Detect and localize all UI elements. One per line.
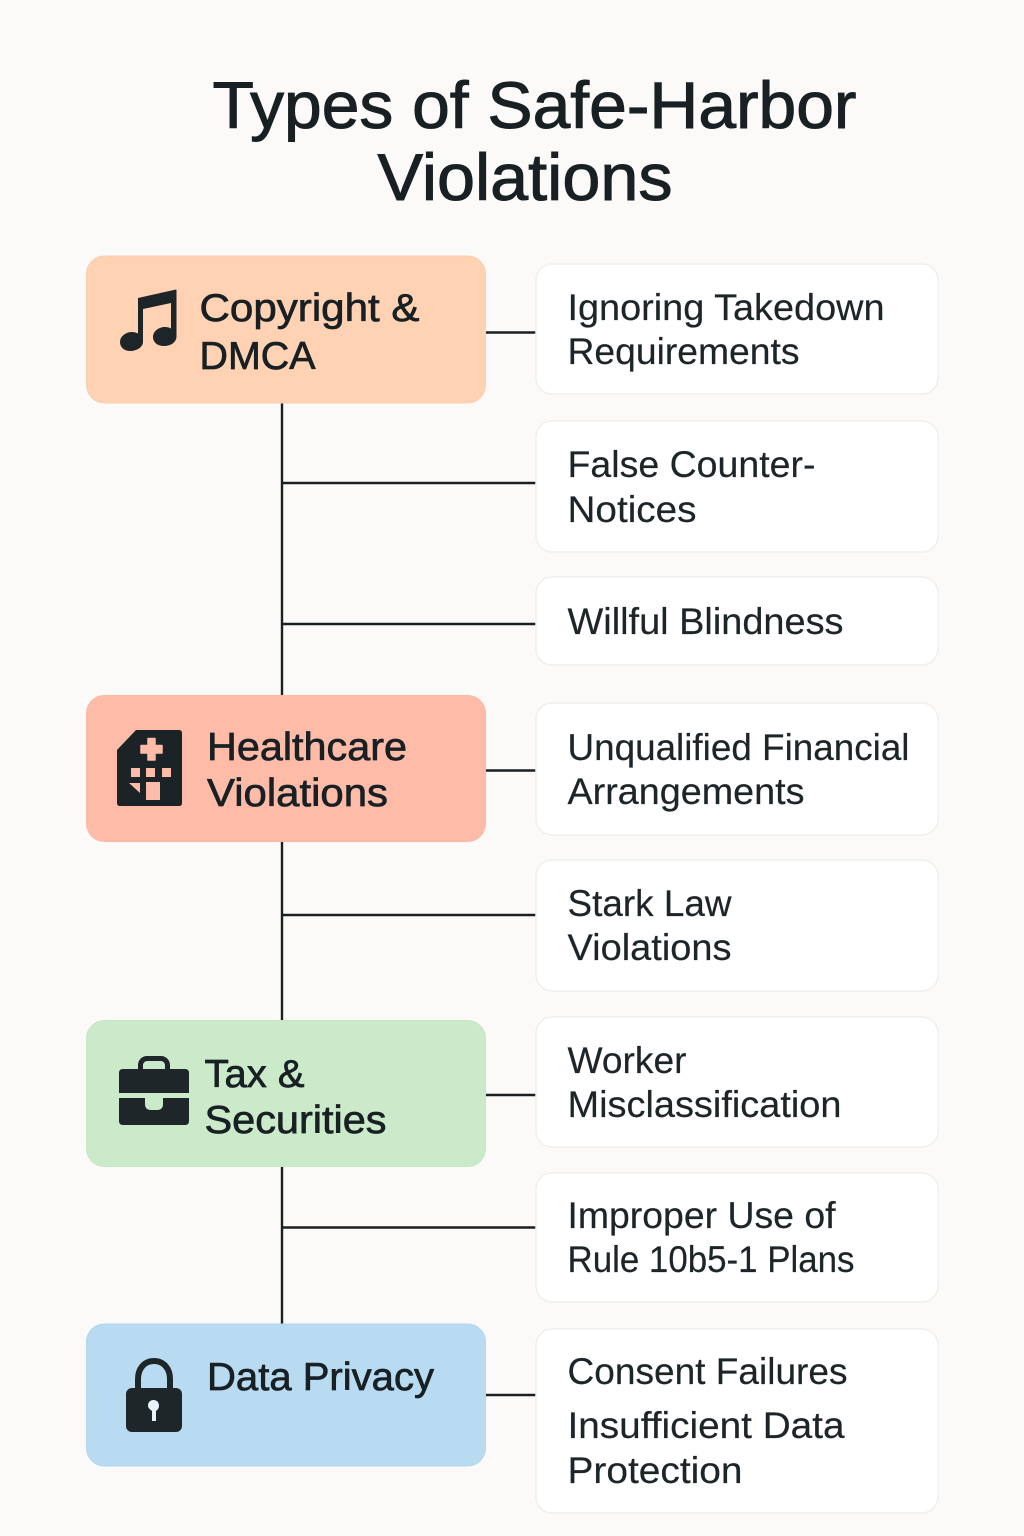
card: False Counter-Notices: [536, 421, 938, 552]
title: [212, 68, 856, 214]
card: Consent Failures and Insufficient Data Protection: Insufficient Data: [568, 1405, 845, 1446]
heading: Healthcare Violations: Violations: [207, 772, 388, 815]
card: Ignoring Takedown Requirements: Requirements: [568, 331, 800, 372]
panel: data privacy: [86, 1324, 486, 1466]
card: Worker Misclassification: Worker: [568, 1040, 686, 1081]
title: Types of Safe-Harbor: [212, 68, 856, 142]
panel: tax and securities: [86, 1020, 486, 1166]
card: Stark Law Violations: [536, 860, 938, 991]
card: Unqualified Financial Arrangements: Unqualified Financial: [568, 727, 910, 768]
heading: Tax & Securities: Tax &: [204, 1053, 304, 1096]
icon: briefcase: [119, 1056, 189, 1125]
title: Violations: [378, 140, 672, 214]
card: Improper Use of Rule 10b5-1 Plans: Rule 10b5-1 Plans: [568, 1239, 854, 1280]
card: False Counter-Notices: Notices: [568, 489, 696, 530]
heading: Tax & Securities: Securities: [204, 1099, 386, 1142]
panel: copyright and DMCA: [86, 256, 486, 403]
icon: hospital building: [117, 730, 182, 806]
card: Improper Use of Rule 10b5-1 Plans: Improper Use of: [568, 1195, 836, 1236]
card: Consent Failures and Insufficient Data Protection: Consent Failures: [568, 1351, 848, 1392]
card: False Counter-Notices: False Counter-: [568, 444, 816, 485]
heading: Healthcare Violations: Healthcare: [207, 726, 407, 769]
card: Unqualified Financial Arrangements: Arrangements: [568, 771, 804, 812]
card: Consent Failures and Insufficient Data Protection: Protection: [568, 1450, 742, 1491]
connector lines: [282, 332, 536, 1395]
card: Stark Law Violations: Violations: [568, 927, 732, 968]
heading: Copyright & DMCA: Copyright &: [200, 287, 420, 330]
card: Consent Failures and Insufficient Data Protection: [536, 1329, 938, 1513]
heading: Tax & Securities: [204, 1053, 386, 1142]
card: Worker Misclassification: Misclassification: [568, 1084, 842, 1125]
card: Willful Blindness: [536, 577, 938, 665]
card: Improper Use of Rule 10b5-1 Plans: [536, 1173, 938, 1302]
heading: Healthcare Violations: [207, 726, 407, 815]
card: Ignoring Takedown Requirements: [536, 264, 938, 394]
card: Unqualified Financial Arrangements: [536, 703, 938, 835]
icon: music notes: [120, 290, 176, 351]
card: Stark Law Violations: Stark Law: [568, 883, 732, 924]
heading: Copyright & DMCA: DMCA: [200, 335, 316, 378]
heading: Data Privacy: Data Privacy: [207, 1356, 435, 1399]
icon: padlock: [126, 1361, 182, 1432]
panel: healthcare violations: [86, 696, 486, 842]
heading: Copyright & DMCA: [200, 287, 420, 378]
card: Worker Misclassification: [536, 1017, 938, 1147]
card: Willful Blindness: Willful Blindness: [568, 601, 844, 642]
card: Ignoring Takedown Requirements: Ignoring Takedown: [568, 287, 884, 328]
